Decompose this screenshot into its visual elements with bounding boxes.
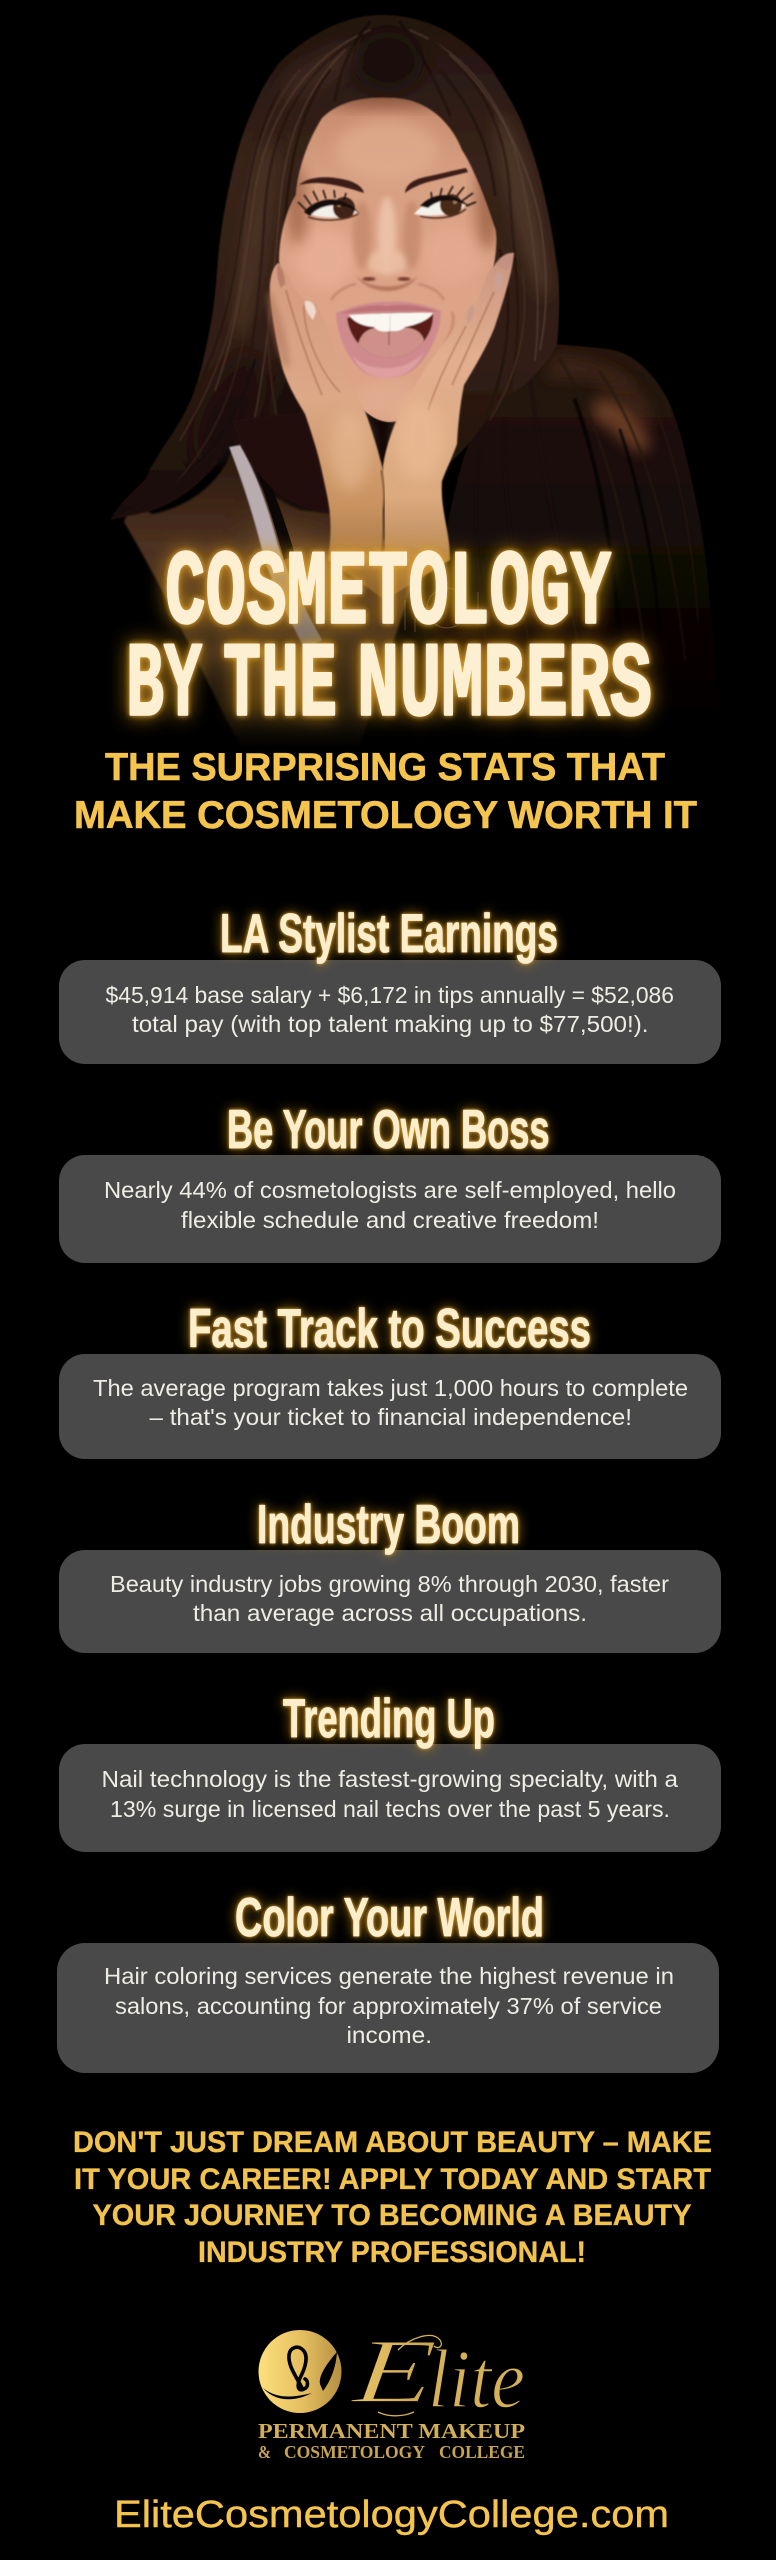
stat text: 13% surge in licensed nail techs over the past 5 years.: [110, 1796, 670, 1822]
hair: right back fall: [430, 340, 720, 745]
panel box: [59, 1550, 721, 1653]
subtitle: THE SURPRISING STATS THAT: [105, 746, 665, 789]
title: THE: [223, 626, 337, 746]
panel box: [59, 1354, 721, 1459]
stat text: than average across all occupations.: [193, 1600, 587, 1626]
neck shadow: [340, 395, 435, 500]
panel box: [59, 960, 721, 1064]
panel: Trending Up: [59, 1687, 721, 1852]
teeth: [349, 313, 433, 332]
icon: butterfly medallion: [258, 2330, 342, 2413]
college name: &: [258, 2442, 271, 2462]
panel: LA Stylist Earnings: [59, 902, 721, 1064]
stat text: Hair coloring services generate the highest revenue in: [104, 1963, 674, 1989]
dress strap: [229, 445, 322, 650]
stat text: flexible schedule and creative freedom!: [181, 1207, 599, 1233]
photo: smiling woman with hands on cheeks: [0, 15, 776, 750]
open mouth: [336, 301, 441, 378]
panel box: [59, 1744, 721, 1852]
call to action: DON'T JUST DREAM ABOUT BEAUTY – MAKE: [73, 2126, 712, 2159]
stat text: – that's your ticket to financial independence!: [150, 1404, 632, 1430]
right eye: [414, 186, 476, 218]
heading: Fast Track to Success: [188, 1297, 591, 1359]
smile creases: [331, 284, 453, 345]
call to action: YOUR JOURNEY TO BECOMING A BEAUTY: [92, 2199, 692, 2232]
right hand: [383, 253, 514, 600]
hair: head and side locks: [110, 15, 559, 520]
heading: Trending Up: [283, 1687, 495, 1749]
subtitle: [74, 746, 697, 837]
panel box: [57, 1943, 719, 2073]
stat text: [106, 982, 674, 1037]
panel box: [59, 1155, 721, 1263]
heading: Be Your Own Boss: [227, 1098, 550, 1160]
left hand: [263, 263, 385, 600]
left eye: [298, 190, 360, 220]
panel: Industry Boom: [59, 1493, 721, 1653]
logo: Elite Permanent Makeup and Cosmetology College: [258, 2320, 525, 2462]
lips: [336, 301, 441, 378]
stat text: Beauty industry jobs growing 8% through 2030, faster: [110, 1571, 669, 1597]
heading: LA Stylist Earnings: [220, 902, 558, 964]
eyebrows: [299, 168, 468, 193]
college name: PERMANENT MAKEUP: [258, 2419, 525, 2443]
hair tips over shoulder: [112, 435, 225, 518]
panel: Be Your Own Boss: [59, 1098, 721, 1263]
subtitle: MAKE COSMETOLOGY WORTH IT: [74, 794, 697, 837]
heading: Industry Boom: [257, 1493, 520, 1555]
heading: Color Your World: [235, 1886, 544, 1948]
tongue: [358, 327, 424, 362]
face: [279, 88, 500, 422]
stat text: Nearly 44% of cosmetologists are self-employed, hello: [104, 1177, 676, 1203]
college name: COSMETOLOGY: [284, 2442, 425, 2462]
stat text: salons, accounting for approximately 37% of service: [115, 1993, 662, 2019]
stat text: [93, 1375, 688, 1430]
stat text: income.: [346, 2022, 432, 2048]
panel: Fast Track to Success: [59, 1297, 721, 1459]
website url: EliteCosmetologyCollege.com: [114, 2494, 669, 2536]
title: BY: [126, 626, 202, 746]
call to action: INDUSTRY PROFESSIONAL!: [198, 2236, 586, 2269]
panel: Color Your World: [57, 1886, 719, 2073]
wrist seam: [381, 470, 384, 560]
wordmark: Elite: E: [347, 2320, 440, 2422]
bottom fade: [0, 545, 776, 750]
stat text: Nail technology is the fastest-growing specialty, with a: [102, 1766, 678, 1792]
college name: [258, 2419, 525, 2462]
dark dress edge beside strap: [252, 455, 295, 560]
college name: COLLEGE: [439, 2442, 525, 2462]
watch-like ring on wrist: [405, 588, 478, 632]
title: [126, 534, 652, 746]
stat text: [104, 1963, 674, 2048]
stat text: [104, 1177, 676, 1233]
call to action: IT YOUR CAREER! APPLY TODAY AND START: [74, 2163, 711, 2196]
nostrils: [362, 277, 410, 281]
stat text: total pay (with top talent making up to $77,500!).: [132, 1011, 648, 1037]
call to action: [73, 2126, 712, 2269]
left shoulder and arm: [124, 448, 420, 745]
hair lock over strap: [232, 410, 349, 512]
mouth interior: [347, 313, 433, 358]
wordmark: Elite: [347, 2320, 525, 2426]
stat text: [102, 1766, 678, 1822]
wordmark: Elite: lite: [428, 2333, 525, 2426]
stat text: [110, 1571, 669, 1626]
stat text: The average program takes just 1,000 hours to complete: [93, 1375, 688, 1401]
stat text: $45,914 base salary + $6,172 in tips annually = $52,086: [106, 982, 674, 1008]
